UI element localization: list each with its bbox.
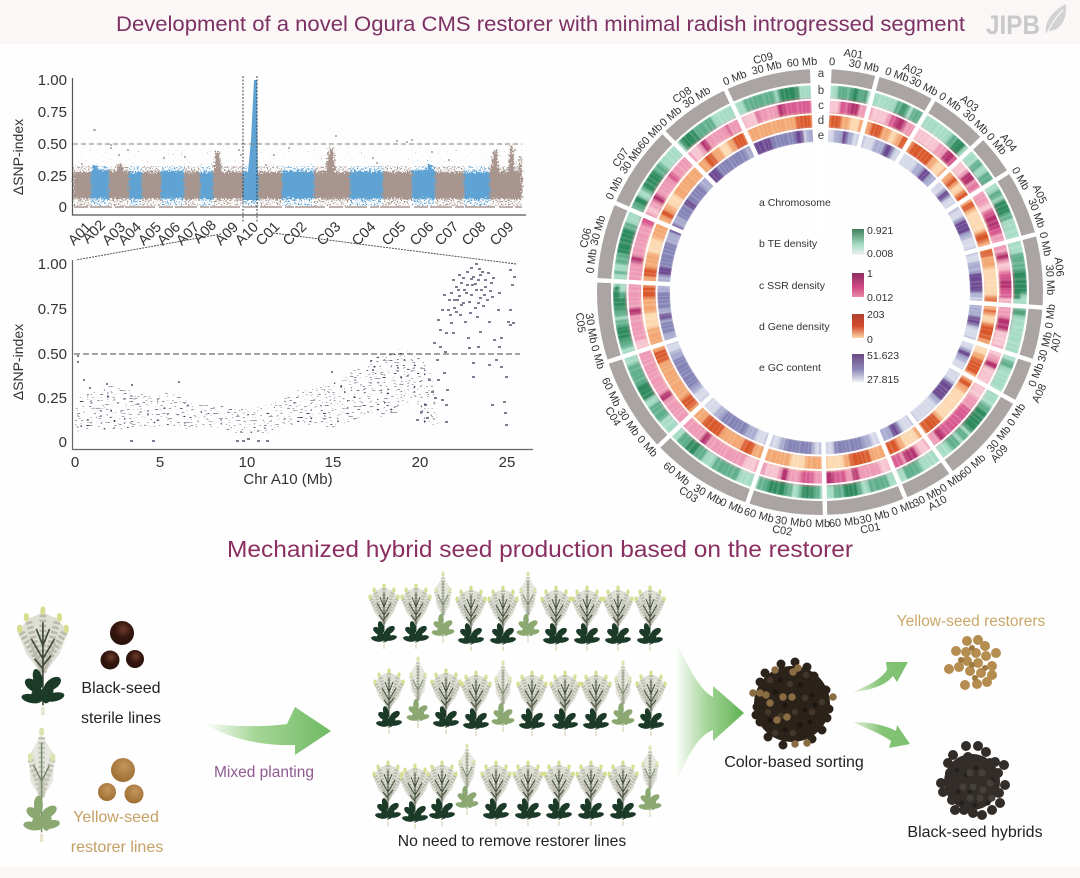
top title band — [0, 0, 1080, 44]
chromosome bands — [73, 146, 522, 200]
JIPB logo: JIPB — [986, 10, 1040, 40]
chromosome and position labels: 30 Mb — [858, 508, 891, 527]
colour scale values: 0.921 — [867, 225, 893, 237]
chromosome and position labels: A04 — [997, 132, 1019, 154]
chromosome and position labels: 30 Mb — [681, 85, 713, 111]
y axis tick labels: 1.00 — [38, 72, 67, 89]
chromosome and position labels: 0 Mb — [1027, 362, 1047, 389]
colour scale values: 0.012 — [867, 292, 893, 304]
y axis title: ΔSNP-index — [10, 324, 26, 400]
track letters: a — [818, 68, 825, 80]
label: yellow-seed restorer lines: Yellow-seed — [73, 809, 159, 826]
arrow: mixed planting — [204, 707, 331, 755]
chromosome and position labels: 0 Mb — [936, 90, 963, 114]
high region points — [77, 264, 516, 441]
x axis tick labels: 10 — [239, 454, 255, 471]
chromosome and position labels: C09 — [752, 51, 774, 67]
chromosome labels: C08 — [459, 219, 489, 249]
chromosome labels: C01 — [253, 219, 283, 249]
zero-value row — [74, 206, 522, 208]
row 1 — [369, 573, 665, 651]
y axis tick labels: 0 — [59, 199, 67, 216]
colour scale values: 0 — [867, 334, 873, 346]
chromosome and position labels: 0 Mb — [1009, 165, 1031, 192]
chromosome and position labels: 30 Mb — [615, 406, 642, 438]
chromosome labels: A05 — [135, 219, 165, 249]
title: Development of a novel Ogura CMS restorer with minimal radish introgressed segment — [116, 12, 965, 36]
JIPB logo — [986, 4, 1066, 40]
chromosome and position labels: 0 Mb — [883, 65, 910, 85]
chromosome and position labels: 0 Mb — [890, 498, 917, 518]
chromosome and position labels: 60 Mb — [599, 376, 623, 409]
A10 peak — [244, 80, 258, 200]
axes — [72, 260, 533, 450]
label: mixed planting: Mixed planting — [214, 764, 314, 781]
chromosome and position labels: A08 — [1030, 382, 1049, 405]
chromosome and position labels: 60 Mb — [660, 460, 692, 488]
chromosome and position labels: 30 Mb — [583, 312, 599, 344]
threshold line — [73, 143, 522, 145]
chromosome and position labels: C06 — [578, 227, 594, 249]
chromosome and position labels: 60 Mb — [957, 452, 988, 481]
x axis tick labels: 25 — [499, 454, 515, 471]
chromosome labels: C04 — [349, 219, 379, 249]
chromosome and position labels: 0 Mb — [1043, 303, 1058, 329]
y axis tick labels: 0 — [59, 434, 67, 451]
sector gaps — [588, 68, 1051, 524]
chromosome and position labels: 60 Mb — [786, 56, 818, 70]
zoom connector lines — [76, 233, 516, 264]
chromosome and position labels: 30 Mb — [1025, 197, 1047, 230]
chromosome and position labels: 30 Mb — [985, 424, 1014, 455]
track legend labels — [759, 197, 831, 374]
chromosome labels: A04 — [115, 219, 145, 249]
track legend labels: d Gene density — [759, 321, 830, 333]
chromosome and position labels: A06 — [1052, 257, 1066, 277]
track letters: b — [818, 85, 824, 97]
chromosome and position labels: 0 Mb — [604, 175, 626, 202]
sparse points above chromosome bands — [73, 150, 522, 172]
chromosome and position labels: 30 Mb — [848, 57, 880, 75]
Manhattan plot: genome-wide delta SNP-index — [10, 72, 526, 249]
yellow-seed restorer plant — [23, 730, 61, 842]
colour scale values — [867, 225, 899, 386]
chromosome labels: A02 — [79, 217, 109, 247]
chromosome and position labels: A10 — [926, 493, 949, 513]
chromosome and position labels: A07 — [1049, 331, 1065, 353]
chromosome labels: C02 — [280, 219, 310, 249]
track legend labels: b TE density — [759, 238, 818, 250]
chromosome and position labels: A09 — [989, 443, 1011, 465]
x axis tick labels: 20 — [412, 454, 428, 471]
black-seed sterile plant — [18, 609, 68, 715]
chromosome labels: C09 — [487, 219, 517, 249]
ring a: chromosome — [604, 76, 1036, 508]
chromosome and position labels: C07 — [610, 146, 632, 170]
chromosome and position labels: 30 Mb — [750, 59, 783, 78]
y axis tick labels: 0.50 — [38, 346, 67, 363]
highlighted A10 region lines — [243, 76, 257, 222]
chromosome and position labels: C08 — [671, 85, 694, 106]
chromosome and position labels: 60 Mb — [742, 506, 775, 526]
chromosome and position labels: 0 — [829, 56, 835, 68]
y axis tick labels — [38, 72, 67, 216]
chromosome and position labels: 0 Mb — [806, 518, 830, 530]
chromosome and position labels: A02 — [901, 61, 924, 80]
y axis tick labels: 1.00 — [38, 256, 67, 273]
label: black-seed sterile lines — [81, 680, 161, 727]
y axis tick labels: 0.75 — [38, 104, 67, 121]
chromosome and position labels: A03 — [958, 93, 980, 115]
y axis tick labels: 0.75 — [38, 301, 67, 318]
chromosome and position labels — [573, 47, 1066, 539]
label: yellow-seed restorer lines — [71, 809, 163, 856]
outlier points — [81, 130, 516, 165]
chromosome and position labels: 30 Mb — [588, 214, 608, 247]
row 2 — [374, 658, 666, 736]
mixed seed pile — [753, 662, 833, 745]
mixed plant rows — [369, 573, 666, 829]
axes — [72, 78, 526, 215]
chromosome and position labels: 60 Mb — [636, 121, 665, 152]
chromosome and position labels: 30 Mb — [1036, 331, 1055, 363]
chromosome and position labels: 30 Mb — [618, 144, 645, 176]
chromosome and position labels: 0 Mb — [984, 131, 1009, 157]
x axis tick labels — [71, 454, 515, 471]
heat tracks b to e — [620, 92, 1020, 492]
arrow to yellow-seed restorers — [853, 662, 908, 692]
circos plot — [573, 47, 1066, 539]
track legend labels: e GC content — [759, 362, 821, 374]
chromosome labels: C07 — [432, 219, 462, 249]
chromosome and position labels: 30 Mb — [691, 482, 724, 508]
chromosome and position labels: 0 Mb — [634, 434, 660, 460]
chromosome labels: C03 — [314, 219, 344, 249]
dense fuzz around chromosome bands — [73, 166, 522, 206]
track legend labels: a Chromosome — [759, 197, 831, 209]
chromosome labels: A06 — [154, 219, 184, 249]
chromosome and position labels: C01 — [859, 521, 881, 537]
colour scale values: 203 — [867, 309, 885, 321]
chromosome labels: C06 — [407, 219, 437, 249]
label: black-seed sterile lines: Black-seed — [81, 680, 161, 697]
chromosome and position labels: 30 Mb — [960, 108, 991, 137]
y axis tick labels: 0.50 — [38, 136, 67, 153]
x axis tick labels: 0 — [71, 454, 79, 471]
chromosome and position labels: 30 Mb — [774, 514, 806, 530]
chromosome and position labels: 0 Mb — [938, 471, 965, 495]
inner white margin — [674, 146, 966, 438]
chromosome and position labels: 30 Mb — [907, 74, 940, 99]
colour scale bars — [852, 229, 864, 382]
arrow to black-seed hybrids — [853, 722, 910, 748]
chromosome and position labels: C02 — [771, 524, 793, 539]
chromosome and position labels: 0 Mb — [658, 104, 684, 129]
track letters: c — [818, 100, 824, 112]
colour scale values: 51.623 — [867, 350, 899, 362]
y axis tick labels: 0.25 — [38, 168, 67, 185]
chromosome and position labels: A01 — [843, 47, 864, 62]
label: color-based sorting: Color-based sorting — [724, 754, 864, 771]
chromosome labels: C05 — [379, 219, 409, 249]
yellow seeds — [98, 758, 144, 804]
x axis title: Chr A10 (Mb) — [243, 471, 333, 488]
chromosome labels: A08 — [190, 217, 220, 247]
x axis tick labels: 15 — [325, 454, 341, 471]
track letters: e — [818, 130, 824, 142]
chromosome and position labels: 0 Mb — [1037, 231, 1053, 257]
dense low region points — [75, 348, 438, 434]
chromosome and position labels: 60 Mb — [828, 515, 860, 530]
colour scale values: 0.008 — [867, 248, 893, 260]
bottom band — [0, 867, 1080, 878]
chromosome and position labels: C05 — [573, 312, 587, 334]
x axis tick labels: 5 — [156, 454, 164, 471]
label: yellow-seed restorer lines: restorer lines — [71, 839, 163, 856]
chromosome and position labels: 0 Mb — [1005, 401, 1028, 428]
chromosome and position labels: 0 Mb — [721, 68, 749, 88]
section heading: Mechanized hybrid seed production based on the restorer — [227, 536, 853, 562]
label: no need to remove restorer lines: No need to remove restorer lines — [398, 833, 626, 850]
chromosome and position labels: 30 Mb — [1043, 264, 1056, 296]
chromosome labels: A09 — [212, 219, 242, 249]
chromosome labels: A07 — [173, 219, 203, 249]
label: black-seed sterile lines: sterile lines — [81, 710, 161, 727]
chromosome and position labels: 0 Mb — [588, 344, 607, 371]
row 3 — [373, 745, 662, 829]
yellow seed pile — [949, 640, 996, 685]
chromosome and position labels: C03 — [676, 484, 700, 505]
chromosome labels: A03 — [99, 219, 129, 249]
scatter plot: chromosome A10 zoom — [10, 256, 533, 488]
chromosome and position labels: 30 Mb — [911, 485, 944, 510]
chromosome labels: A01 — [65, 219, 95, 249]
label: black-seed hybrids: Black-seed hybrids — [907, 824, 1043, 841]
colour scale values: 27.815 — [867, 374, 899, 386]
top wedge gap — [810, 67, 832, 292]
chromosome and position labels: 0 Mb — [718, 496, 745, 517]
colour scale values: 1 — [867, 268, 873, 280]
track letters: d — [818, 115, 824, 127]
chromosome and position labels: A05 — [1030, 183, 1049, 206]
track legend labels: c SSR density — [759, 280, 826, 292]
threshold line — [74, 353, 520, 355]
black seed pile — [941, 746, 1005, 815]
chromosome labels — [65, 217, 517, 249]
y axis title: ΔSNP-index — [10, 119, 26, 195]
chromosome and position labels: 0 Mb — [584, 248, 600, 274]
track letters — [818, 68, 825, 142]
chromosome and position labels: C04 — [602, 405, 623, 428]
y axis tick labels: 0.25 — [38, 390, 67, 407]
funnel arrow to sorting — [675, 640, 744, 785]
y axis tick labels — [38, 256, 67, 451]
label: yellow-seed restorers: Yellow-seed restorers — [897, 613, 1045, 630]
chromosome labels: A10 — [232, 219, 262, 249]
black seeds — [100, 621, 144, 670]
